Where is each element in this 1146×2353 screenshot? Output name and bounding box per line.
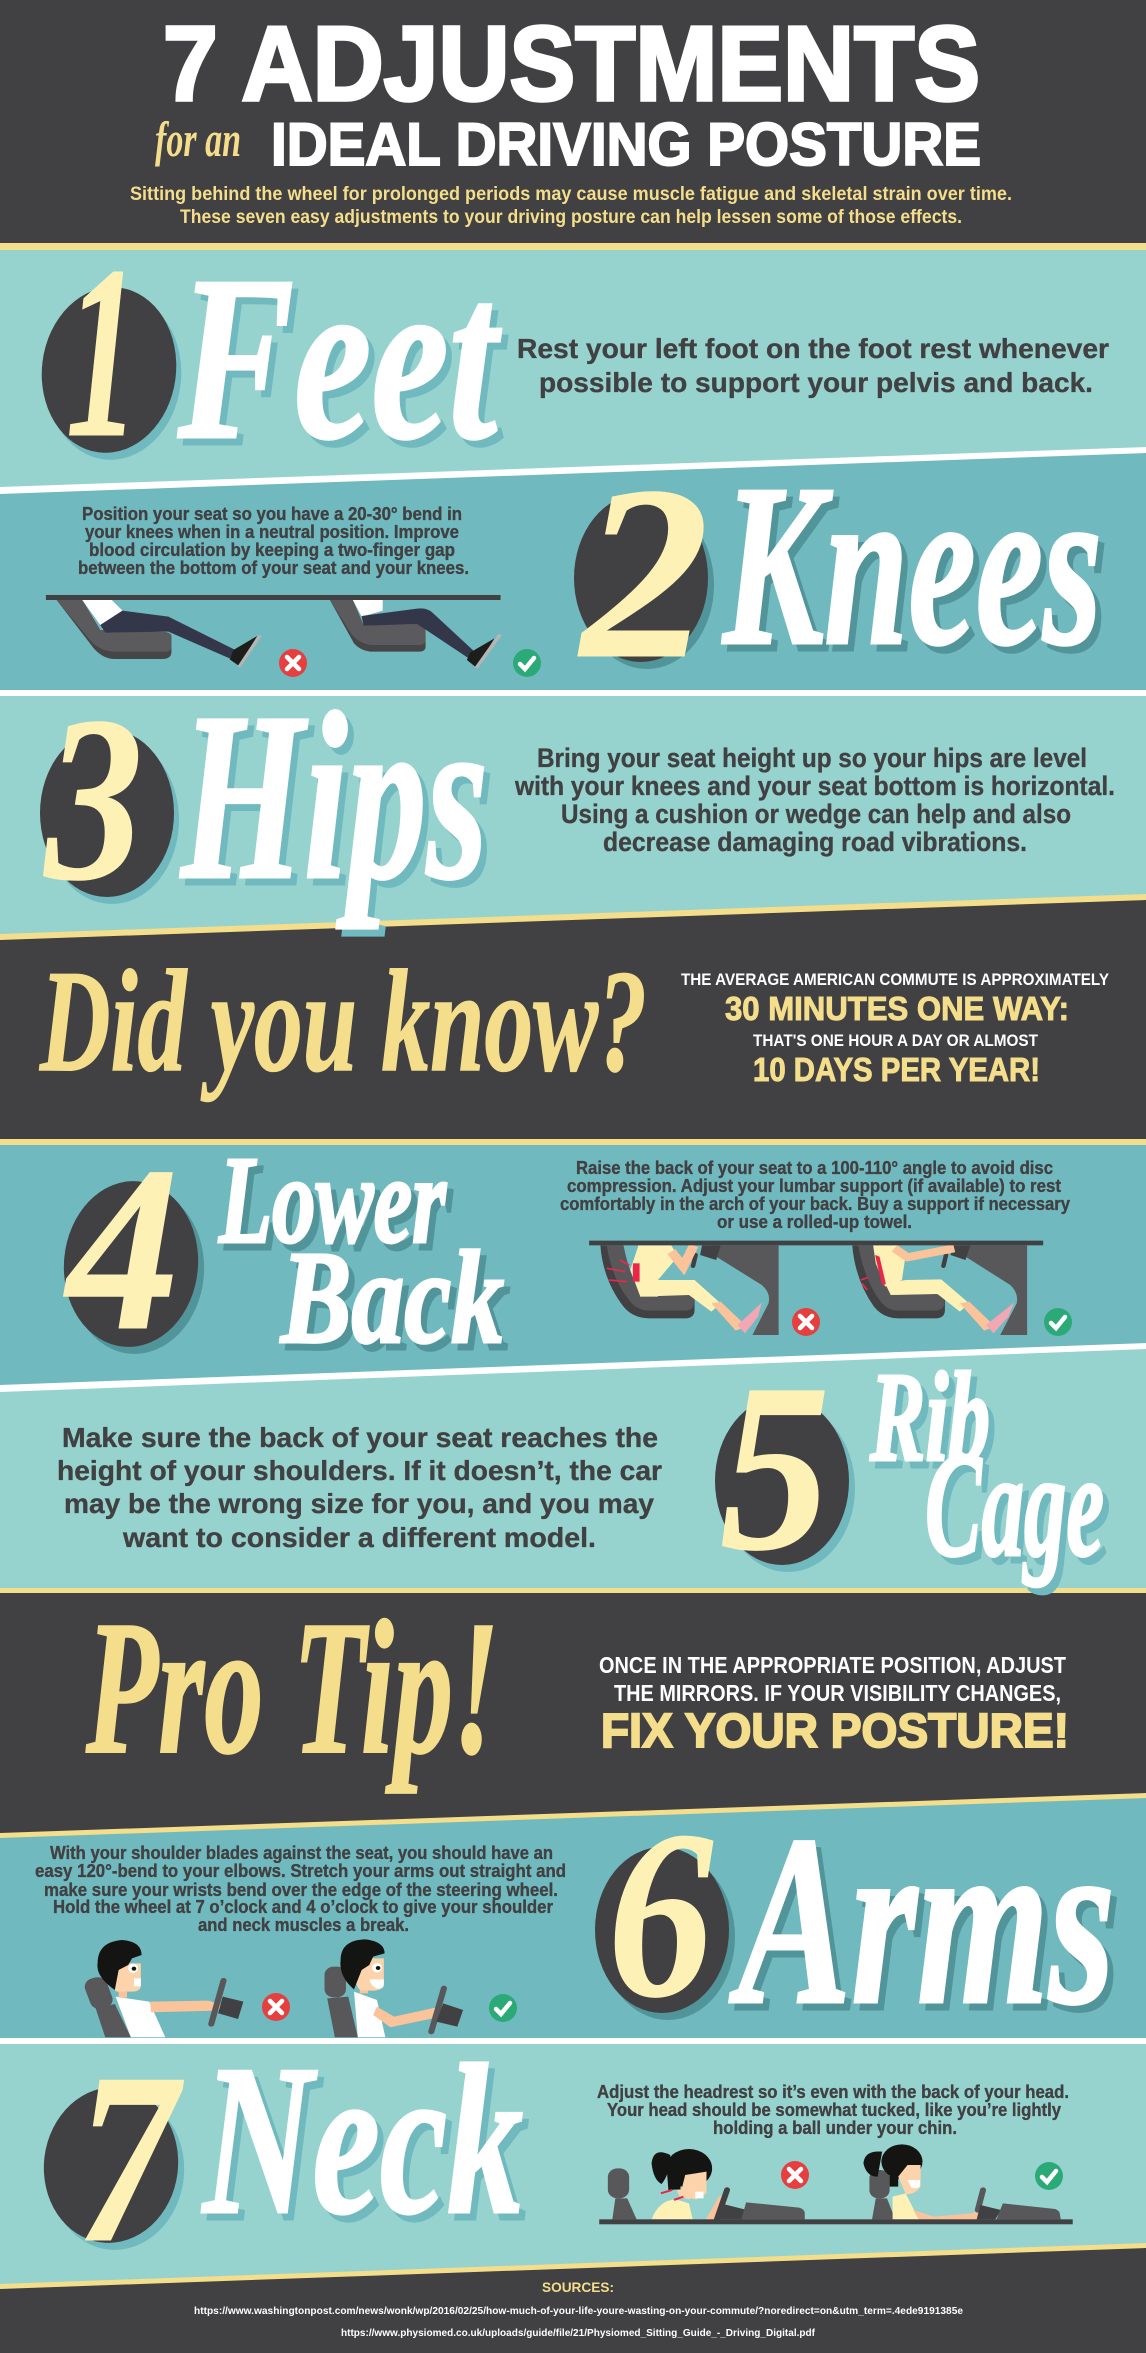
tip text: FIX YOUR POSTURE! <box>601 1705 1069 1758</box>
number badge 1: 1 <box>66 216 139 489</box>
commute fact <box>681 970 1110 1088</box>
icon: wrong <box>781 2161 809 2189</box>
panel: did you know <box>39 940 1110 1102</box>
text: rib cage <box>57 1422 662 1553</box>
text: hips <box>514 743 1115 857</box>
number badge 6: 6 <box>608 1781 713 2047</box>
text: neck: Your head should be somewhat tucked, like you’re lightly <box>607 2100 1061 2120</box>
panel: pro tip <box>85 1581 1069 1794</box>
text: rib cage: want to consider a different model. <box>122 1522 596 1553</box>
sources <box>194 2279 963 2339</box>
commute fact: 10 DAYS PER YEAR! <box>753 1051 1040 1088</box>
panel: 1 feet <box>32 216 1109 489</box>
text: arms: With your shoulder blades against the seat, you should have an <box>50 1843 553 1863</box>
panel: 7 neck <box>35 2020 1073 2293</box>
panel: 4 lower back <box>57 1119 1072 1380</box>
text: arms <box>35 1843 566 1935</box>
icon: correct <box>1044 1308 1072 1336</box>
panel: 6 arms <box>35 1781 1115 2055</box>
number badge 4: 4 <box>63 1119 179 1380</box>
text: knees <box>78 504 469 578</box>
tip text: THE MIRRORS. IF YOUR VISIBILITY CHANGES, <box>614 1680 1061 1706</box>
number badge 2: 2 <box>577 435 709 710</box>
text: hips: Bring your seat height up so your hips are level <box>537 743 1087 773</box>
text: rib cage: Make sure the back of your seat reaches the <box>62 1422 658 1453</box>
commute fact: THAT'S ONE HOUR A DAY OR ALMOST <box>753 1031 1039 1050</box>
text: arms: Hold the wheel at 7 o’clock and 4 o’clock to give your shoulder <box>53 1897 553 1917</box>
text: neck: holding a ball under your chin. <box>713 2118 957 2138</box>
panel: 3 hips <box>40 663 1115 930</box>
intro text: Sitting behind the wheel for prolonged periods may cause muscle fatigue and skeletal strain over time. <box>130 184 1012 205</box>
text: hips: decrease damaging road vibrations. <box>603 827 1027 857</box>
text: lower back: compression. Adjust your lumbar support (if available) to rest <box>567 1176 1061 1196</box>
text: knees: your knees when in a neutral position. Improve <box>85 522 459 542</box>
illustration: arm positions <box>82 1939 463 2037</box>
text: neck: Adjust the headrest so it’s even with the back of your head. <box>597 2082 1069 2102</box>
icon: wrong <box>792 1308 820 1336</box>
sources: SOURCES: <box>542 2279 614 2295</box>
icon: correct <box>1035 2162 1063 2190</box>
text: arms: easy 120°-bend to your elbows. Stretch your arms out straight and <box>35 1861 566 1881</box>
subtitle: IDEAL DRIVING POSTURE <box>271 111 981 178</box>
illustration: neck positions <box>599 2144 1073 2224</box>
title: 7 ADJUSTMENTS <box>163 5 980 123</box>
icon: wrong <box>279 649 307 677</box>
text: lower back <box>560 1158 1070 1232</box>
sources: https://www.washingtonpost.com/news/wonk/wp/2016/02/25/how-much-of-your-life-youre-wasting-on-your-commute/?noredirect=on&utm_term=.4ede9191385e <box>194 2305 963 2317</box>
heading: Rib Cage <box>869 1346 1104 1588</box>
illustration: knee positions <box>46 595 502 669</box>
heading: Hips: Hips <box>180 663 488 929</box>
text: feet: possible to support your pelvis and back. <box>539 367 1093 398</box>
intro text <box>130 184 1012 228</box>
text: lower back: or use a rolled-up towel. <box>717 1212 912 1232</box>
number badge 3: 3 <box>43 669 143 930</box>
tip text: ONCE IN THE APPROPRIATE POSITION, ADJUST <box>599 1652 1066 1678</box>
icon: correct <box>489 1994 517 2022</box>
heading: Rib Cage: Rib <box>869 1346 990 1488</box>
commute fact: THE AVERAGE AMERICAN COMMUTE IS APPROXIMATELY <box>681 970 1110 989</box>
heading: Lower Back: Lower <box>218 1132 447 1270</box>
tip text <box>599 1652 1069 1758</box>
text: arms: make sure your wrists bend over the edge of the steering wheel. <box>44 1880 558 1900</box>
intro text: These seven easy adjustments to your driving posture can help lessen some of those effects. <box>180 207 962 228</box>
text: knees: between the bottom of your seat and your knees. <box>78 558 469 578</box>
text: feet: Rest your left foot on the foot rest whenever <box>517 333 1109 364</box>
heading: Neck: Neck <box>202 2020 523 2259</box>
text: neck <box>597 2082 1069 2138</box>
heading: Did you know: Did you know? <box>39 940 647 1102</box>
icon: wrong <box>262 1993 290 2021</box>
panel: 5 rib cage <box>57 1334 855 1600</box>
heading: Feet: Feet <box>177 228 502 488</box>
subtitle script: for an <box>155 111 241 167</box>
text: hips: Using a cushion or wedge can help and also <box>561 799 1071 829</box>
commute fact: 30 MINUTES ONE WAY: <box>725 990 1069 1027</box>
heading: Lower Back: Back <box>279 1223 504 1371</box>
text: knees: blood circulation by keeping a two-finger gap <box>89 540 455 560</box>
text: lower back: comfortably in the arch of your back. Buy a support if necessary <box>560 1194 1070 1214</box>
text: rib cage: may be the wrong size for you, and you may <box>64 1488 654 1519</box>
illustration: seat angle <box>589 1241 1043 1335</box>
icon: correct <box>513 649 541 677</box>
number badge 5: 5 <box>720 1334 830 1600</box>
text: arms: and neck muscles a break. <box>198 1915 409 1935</box>
heading: Lower Back <box>218 1132 504 1371</box>
text: feet <box>517 333 1109 398</box>
panel: 2 knees <box>46 435 1102 710</box>
heading: Pro Tip: Pro Tip! <box>85 1581 499 1794</box>
text: lower back: Raise the back of your seat to a 100-110° angle to avoid disc <box>576 1158 1053 1178</box>
sources: https://www.physiomed.co.uk/uploads/guide/file/21/Physiomed_Sitting_Guide_-_Driving_Digital.pdf <box>341 2327 815 2339</box>
text: rib cage: height of your shoulders. If it doesn’t, the car <box>57 1455 662 1486</box>
header <box>130 5 1012 228</box>
text: knees: Position your seat so you have a 20-30° bend in <box>82 504 462 524</box>
number badge 7: 7 <box>77 2023 184 2293</box>
